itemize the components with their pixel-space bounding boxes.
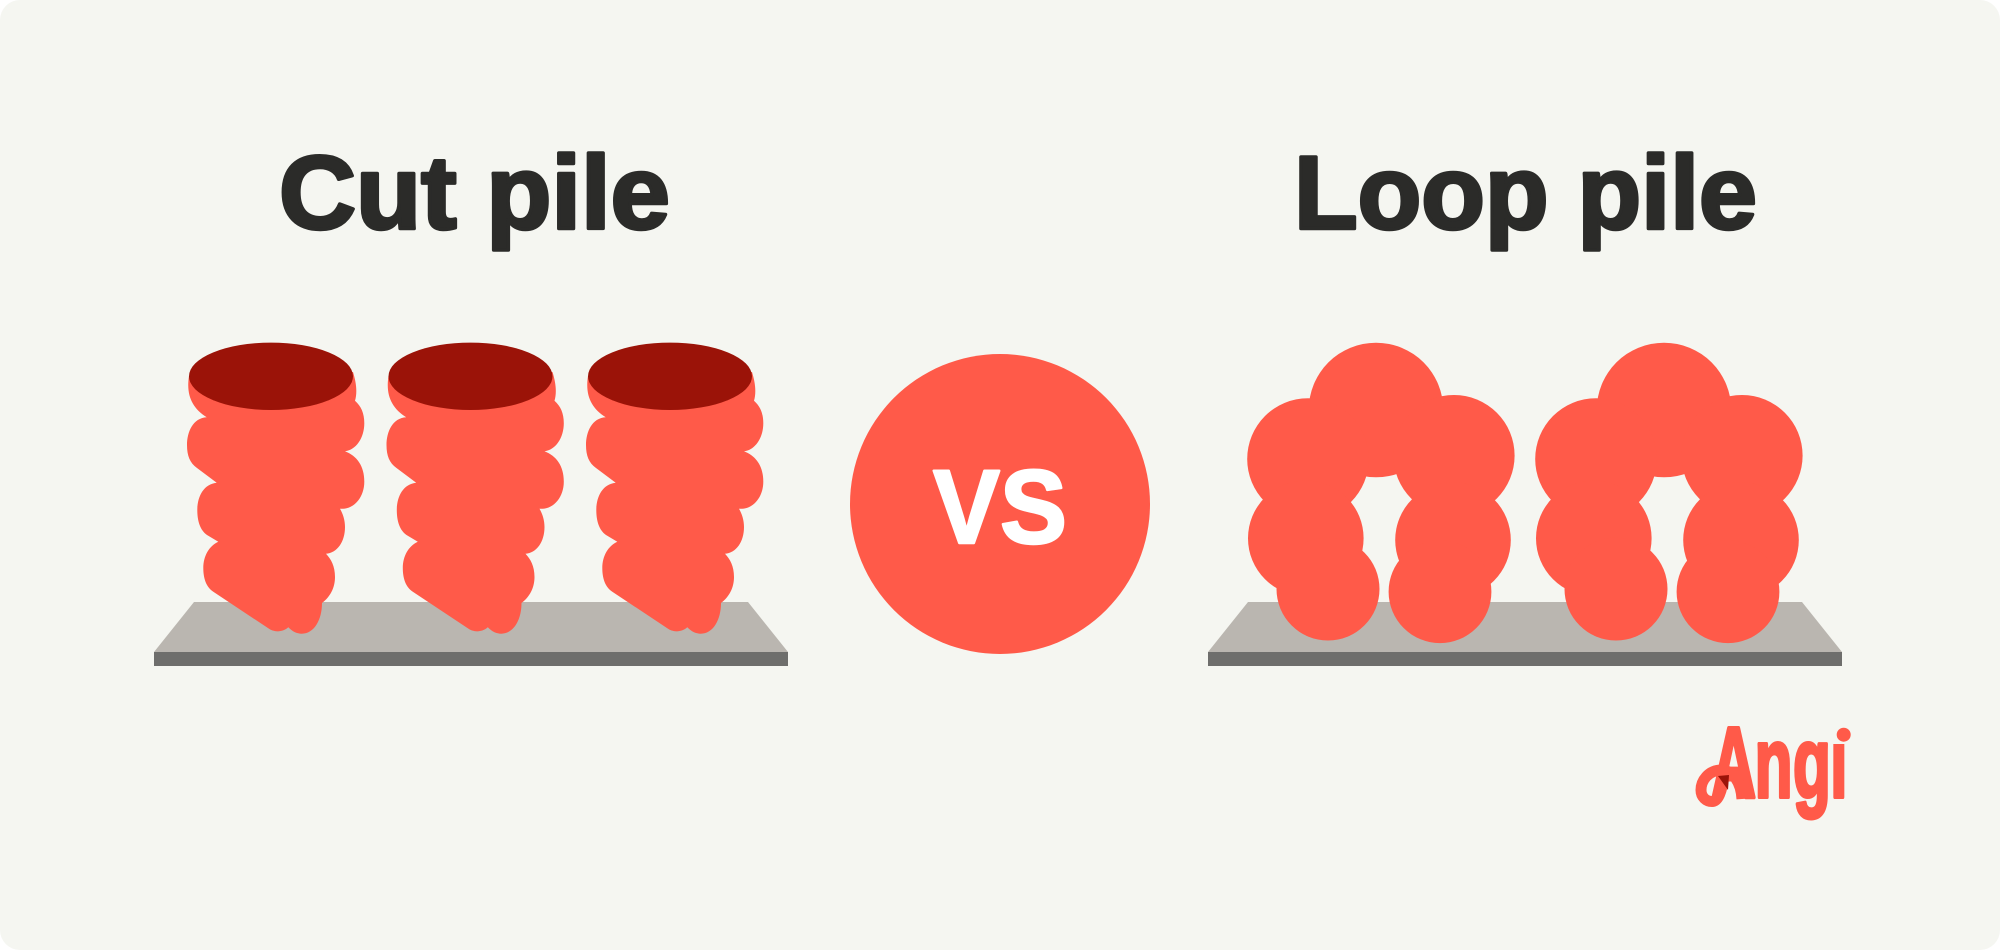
cut tuft 1 (187, 343, 364, 634)
logo i-dot (1837, 728, 1851, 742)
logo wordmark: Angi (1711, 707, 1847, 819)
cut tuft 2 (386, 343, 564, 634)
logo: Angi (1701, 707, 1856, 819)
vs badge (850, 354, 1150, 654)
vs label: VS (933, 449, 1067, 566)
logo i-dot mask (1832, 716, 1856, 744)
panel: cut pile illustration (154, 343, 788, 666)
logo swash (1701, 770, 1742, 802)
cut tuft 3 (586, 343, 763, 634)
logo fold (1718, 775, 1729, 790)
heading: Loop pile: Loop pile (1294, 136, 1757, 252)
carpet backing: cut pile (154, 602, 788, 666)
loop tuft 2 (1535, 343, 1803, 643)
panel: loop pile illustration (1208, 343, 1842, 666)
carpet backing: loop pile (1208, 602, 1842, 666)
heading: Cut pile: Cut pile (279, 136, 670, 252)
loop tuft 1 (1247, 343, 1515, 643)
